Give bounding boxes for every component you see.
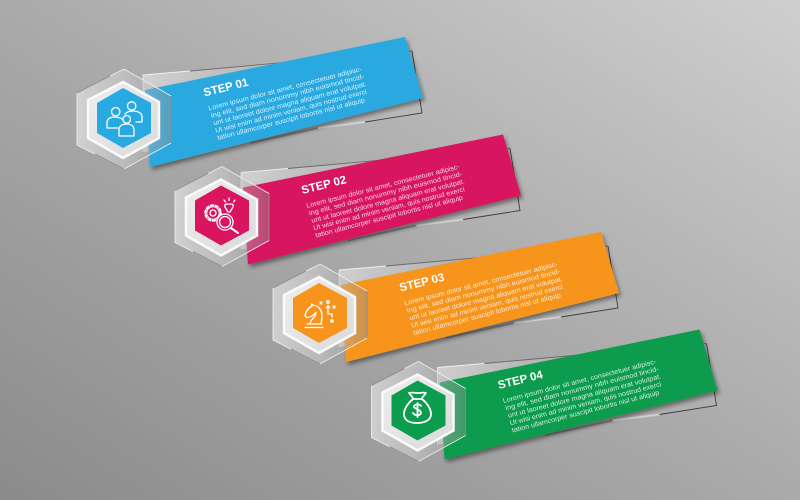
text block 4: [502, 359, 663, 434]
glass panel behind card 4: [438, 344, 716, 444]
glass panel behind card 3: [339, 246, 618, 347]
text block 1: Lorem ipsum dolor sit amet, consectetuer adipisc-: [208, 66, 362, 112]
heading: step 02: STEP 02: [300, 174, 348, 197]
text block 4: Lorem ipsum dolor sit amet, consectetuer adipisc-: [502, 359, 657, 405]
text block 4: ing elit, sed diam nonummy nibh euismod tincid-: [505, 366, 659, 412]
text block 2: [306, 164, 466, 239]
step 4: [372, 330, 718, 462]
text block 2: unt ut laoreet dolore magna aliquam erat volutpat.: [311, 178, 466, 225]
icon: people: [107, 102, 142, 136]
glass panel behind card 2: [241, 148, 520, 250]
text block 1: [208, 66, 368, 142]
step 3: [273, 232, 619, 364]
hexagon badge 4: [372, 362, 466, 462]
text block 1: Ut wisi enim ad minim veniam, quis nostrud exerci: [215, 89, 368, 135]
text block 4: Ut wisi enim ad minim veniam, quis nostrud exerci: [509, 381, 663, 427]
card 4: [440, 330, 718, 460]
text block 3: Lorem ipsum dolor sit amet, consectetuer adipisc-: [404, 261, 558, 307]
heading: step 01: STEP 01: [202, 77, 250, 99]
text block 3: tation ullamcorper suscipit lobortis nisl ut aliquip: [413, 292, 562, 337]
text block 2: tation ullamcorper suscipit lobortis nisl ut aliquip: [315, 195, 464, 239]
step 2: [175, 134, 521, 266]
text block 1: tation ullamcorper suscipit lobortis nisl ut aliquip: [217, 97, 366, 142]
text block 2: Ut wisi enim ad minim veniam, quis nostrud exerci: [313, 186, 466, 232]
card 1: [145, 37, 423, 167]
text block 3: [404, 261, 564, 337]
card 3: [341, 232, 619, 362]
icon: money bag: [404, 393, 431, 423]
glass panel behind card 1: [143, 51, 422, 152]
icon: gear and magnifier: [205, 198, 238, 233]
text block 2: Lorem ipsum dolor sit amet, consectetuer adipisc-: [306, 164, 460, 210]
heading: step 03: STEP 03: [398, 272, 446, 294]
heading: step 04: STEP 04: [497, 369, 545, 392]
text block 1: unt ut laoreet dolore magna aliquam erat volutpat.: [213, 81, 368, 127]
step 1: [77, 37, 423, 169]
text block 3: ing elit, sed diam nonummy nibh euismod tincid-: [406, 268, 561, 315]
text block 3: Ut wisi enim ad minim veniam, quis nostrud exerci: [411, 284, 564, 330]
hexagon badge 2: [175, 166, 269, 266]
hexagon badge 1: [77, 69, 171, 169]
text block 4: tation ullamcorper suscipit lobortis nisl ut aliquip: [511, 390, 660, 434]
text block 1: ing elit, sed diam nonummy nibh euismod tincid-: [210, 73, 365, 120]
card 2: [243, 134, 521, 264]
text block 3: unt ut laoreet dolore magna aliquam erat volutpat.: [409, 276, 564, 322]
icon: chess knight strategy: [305, 301, 335, 328]
text block 2: ing elit, sed diam nonummy nibh euismod tincid-: [308, 171, 463, 217]
text block 4: unt ut laoreet dolore magna aliquam erat volutpat.: [507, 373, 662, 420]
hexagon badge 3: [273, 264, 367, 364]
